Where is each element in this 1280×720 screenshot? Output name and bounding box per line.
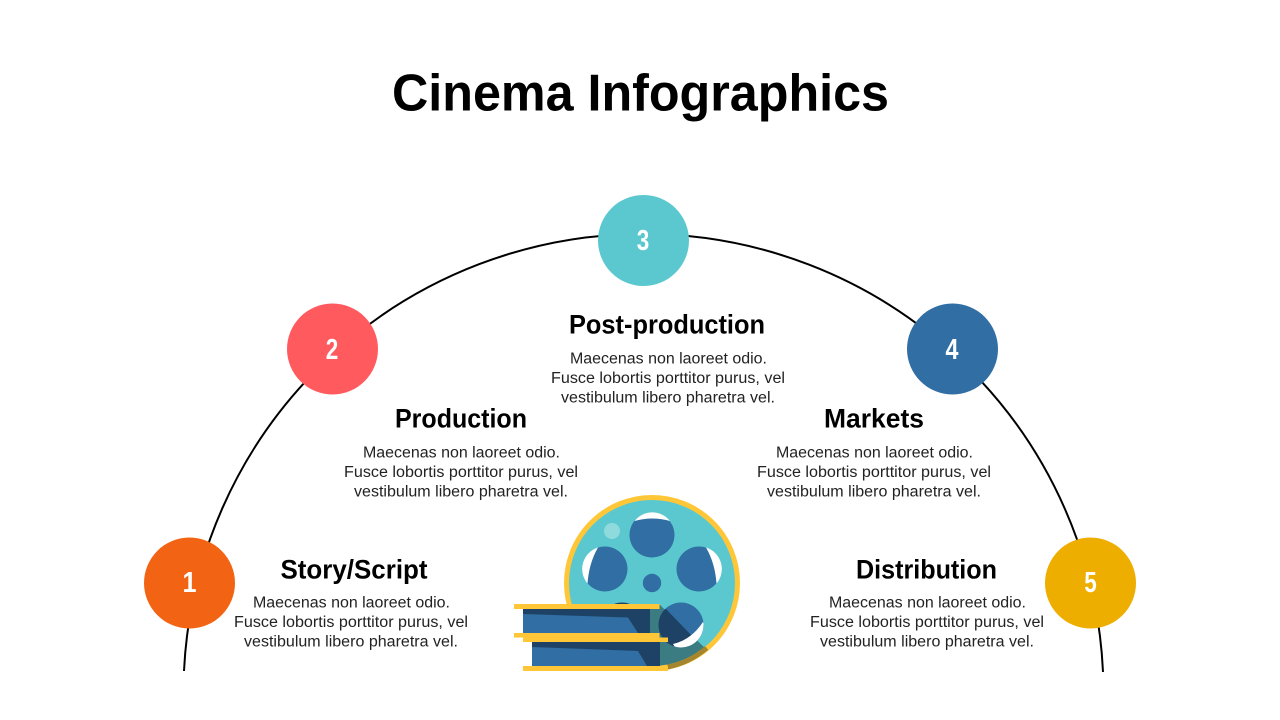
icon: film reel and reels stack <box>514 498 738 680</box>
timeline arc <box>184 234 1103 672</box>
text block: Markets: vestibulum libero pharetra vel. <box>767 484 981 500</box>
text block: Production: Production <box>395 404 527 434</box>
book shadow on reel <box>650 604 704 666</box>
text block: Story/Script: Fusce lobortis porttitor purus, vel <box>234 614 468 631</box>
upper book <box>514 604 660 638</box>
text block: Story/Script: vestibulum libero pharetra vel. <box>244 634 458 650</box>
text block: Post-production: Fusce lobortis porttitor purus, vel <box>551 370 785 387</box>
step 3 marker: 3 <box>637 225 649 257</box>
text block: Story/Script <box>234 554 468 650</box>
shadow on reel rim <box>668 648 707 667</box>
text block: Post-production: Post-production <box>569 310 765 340</box>
title: Cinema Infographics <box>392 64 889 122</box>
step 5 marker <box>1045 538 1136 628</box>
step 5 marker: 5 <box>1084 567 1097 599</box>
step 4 marker: 4 <box>946 334 958 366</box>
text block: Distribution: Distribution <box>856 554 997 584</box>
text block: Markets: Maecenas non laoreet odio. <box>776 444 973 462</box>
text block: Distribution <box>810 554 1044 650</box>
film reel disc <box>566 498 738 668</box>
text block: Post-production: vestibulum libero pharetra vel. <box>561 390 775 406</box>
step 3 marker <box>598 195 689 286</box>
step 2 marker: 2 <box>326 334 338 366</box>
reel centre hole <box>643 574 661 592</box>
text block: Distribution: Maecenas non laoreet odio. <box>829 594 1026 612</box>
text block: Story/Script: Story/Script <box>280 554 428 584</box>
text block: Post-production: Maecenas non laoreet odio. <box>570 350 767 368</box>
text block: Production: Fusce lobortis porttitor purus, vel <box>344 464 578 481</box>
text block: Production <box>344 404 578 500</box>
text block: Markets: Fusce lobortis porttitor purus, vel <box>757 464 991 481</box>
text block: Story/Script: Maecenas non laoreet odio. <box>253 594 450 612</box>
step 1 marker: 1 <box>182 567 196 599</box>
step 2 marker <box>287 304 378 394</box>
reel left hole <box>582 546 628 592</box>
text block: Post-production <box>551 310 785 406</box>
reel top hole <box>630 512 674 558</box>
text block: Markets <box>757 404 991 500</box>
step 1 marker <box>144 538 235 628</box>
reel lower right hole <box>658 602 704 648</box>
text block: Distribution: vestibulum libero pharetra vel. <box>820 634 1034 650</box>
reel right hole <box>676 546 722 592</box>
text block: Production: vestibulum libero pharetra vel. <box>354 484 568 500</box>
step 4 marker <box>907 304 998 394</box>
reel lower left hole <box>600 602 644 648</box>
text block: Markets: Markets <box>824 404 924 434</box>
lower book <box>523 638 668 671</box>
reel highlight <box>604 523 620 539</box>
text block: Production: Maecenas non laoreet odio. <box>363 444 560 462</box>
text block: Distribution: Fusce lobortis porttitor purus, vel <box>810 614 1044 631</box>
